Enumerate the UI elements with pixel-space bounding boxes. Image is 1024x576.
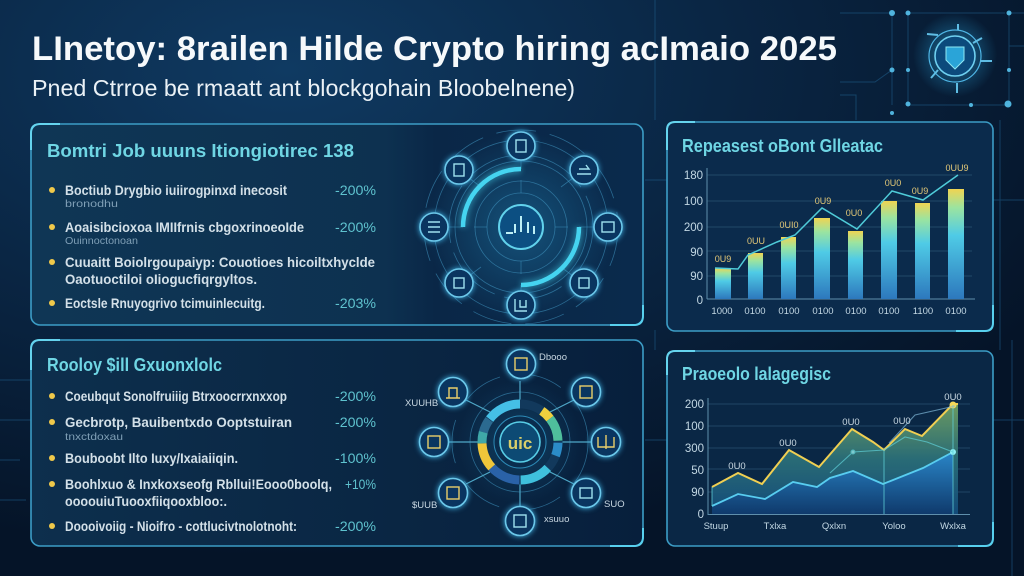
list item 2: Ouinnoctonoan [65, 235, 138, 247]
list item 3: Cuuaitt Boiolrgoupaiyp: Couotioes hicoiltxhyclde [65, 254, 375, 270]
list item 4: Eoctsle Rnuyogrivo tcimuinlecuitg. [65, 295, 265, 311]
heading: Bomtri Job uuuns Itiongiotirec 138 [47, 141, 354, 161]
category labels: 1100 [913, 306, 933, 317]
value labels: 0U0 [728, 461, 746, 472]
panel: job openings [31, 124, 643, 325]
value labels [728, 392, 962, 472]
category labels: 1000 [711, 306, 733, 317]
trend line [715, 175, 958, 269]
list item 2: -200% [335, 219, 376, 235]
list item 1: Coeubqut Sonolfruiiig Btrxoocrrxnxxop [65, 388, 287, 404]
category labels [704, 521, 967, 532]
title: LInetoy: 8railen Hilde Crypto hiring acImaio 2025 [32, 30, 837, 68]
category labels: 0100 [945, 306, 967, 317]
axis and grid: 200 [684, 222, 703, 234]
bars [715, 189, 964, 299]
axis and grid: 100 [684, 196, 703, 208]
blue area series [712, 449, 956, 514]
list item 4 [49, 476, 376, 509]
list item 1: -200% [335, 388, 376, 404]
value labels: 0U0 [842, 417, 860, 428]
list item 2: -200% [335, 414, 376, 430]
heading: Repeasest oBont Glleatac [682, 136, 883, 156]
axis and grid: 300 [685, 443, 704, 455]
axis and grid: 90 [690, 271, 703, 283]
node labels: xsuuo [544, 514, 569, 525]
category labels [711, 306, 967, 317]
center icon: uic [508, 434, 532, 453]
node labels: SUO [604, 499, 625, 510]
category labels: 0100 [744, 306, 766, 317]
list item 2: Gecbrotp, Bauibentxdo Ooptstuiran [65, 414, 292, 430]
list item 2: Aoaisibcioxoa IMIIfrnis cbgoxrinoeoIde [65, 219, 304, 235]
diagram: radial job network [420, 130, 622, 324]
list item 5: -200% [335, 518, 376, 534]
list item 4: -203% [335, 295, 376, 311]
value labels: 0UU [747, 236, 765, 246]
axis and grid [685, 398, 970, 521]
value labels: 0U0 [779, 438, 797, 449]
value labels: 0U0 [893, 416, 911, 427]
axis and grid [684, 168, 975, 307]
list item 3 [49, 450, 376, 466]
node labels: $UUB [412, 500, 437, 511]
list item 3: Oaotuoctiloi oIiogucfiqrgyltos. [65, 271, 257, 287]
axis and grid: 200 [685, 399, 704, 411]
center icon [494, 416, 546, 468]
list item 1: Boctiub Drygbio iuiirogpinxd inecosit [65, 182, 287, 198]
value labels: 0U0 [944, 392, 962, 403]
category labels: Wxlxa [940, 521, 967, 532]
category labels: Qxlxn [822, 521, 846, 532]
panel: area chart [667, 351, 993, 546]
center icon [499, 205, 543, 249]
panel: bar chart [667, 122, 993, 331]
panel: skills demand [31, 340, 643, 546]
secondary line [712, 405, 955, 514]
value labels: 0U9 [715, 254, 731, 264]
category labels: Txlxa [764, 521, 787, 532]
category labels: 0100 [812, 306, 834, 317]
list item 4: Boohlxuo & Inxkoxseofg Rbllui!Eooo0boolq, [65, 476, 332, 492]
list item 4: oooouiuTuooxfiiqooxbloo:. [65, 493, 227, 509]
axis and grid: 0 [698, 509, 704, 521]
yellow area series [712, 402, 958, 514]
heading: Rooloy $ill Gxuonxlolc [47, 355, 222, 375]
bright arcs [463, 169, 579, 285]
nodes [420, 132, 622, 319]
list item 5: Doooivoiig - Nioifro - cottlucivtnolotnoht: [65, 518, 297, 534]
node labels: XUUHB [405, 398, 438, 409]
list item 4: +10% [345, 476, 376, 492]
value labels: 0UU9 [945, 163, 969, 173]
axis and grid: 90 [691, 487, 704, 499]
icon: shield emblem [913, 13, 997, 97]
axis and grid: 50 [691, 465, 704, 477]
value labels: 0U0 [846, 208, 862, 218]
node labels: Dbooo [539, 352, 567, 363]
list item 1 [49, 182, 376, 210]
list item 3: -100% [335, 450, 376, 466]
value labels: 0U9 [912, 186, 928, 196]
axis and grid: 180 [684, 170, 703, 182]
list item 2 [49, 414, 376, 443]
axis and grid: 0 [697, 295, 703, 307]
heading: Praoeolo lalagegisc [682, 364, 831, 384]
list item 1: -200% [335, 182, 376, 198]
list item 3: Bouboobt Ilto Iuxy/Ixaiaiiqin. [65, 450, 238, 466]
category labels: Yoloo [882, 521, 906, 532]
segmented ring [482, 404, 558, 480]
subtitle: Pned Ctrroe be rmaatt ant blockgohain Bloobelnene) [32, 75, 575, 101]
category labels: Stuup [704, 521, 728, 532]
category labels: 0100 [878, 306, 900, 317]
category labels: 0100 [778, 306, 800, 317]
value labels: 0U9 [815, 196, 831, 206]
value labels: 0U0 [885, 178, 901, 188]
node labels [405, 352, 625, 525]
value labels [715, 163, 969, 264]
list item 2: tnxctdoxau [65, 431, 123, 443]
list item 3 [49, 254, 375, 287]
list item 1: bronodhu [65, 198, 118, 210]
category labels: 0100 [845, 306, 867, 317]
axis and grid: 90 [690, 247, 703, 259]
diagram: radial skills wheel [405, 350, 625, 536]
value labels: 0UI0 [779, 220, 799, 230]
nodes [420, 350, 620, 536]
axis and grid: 100 [685, 421, 704, 433]
list item 2 [49, 219, 376, 247]
